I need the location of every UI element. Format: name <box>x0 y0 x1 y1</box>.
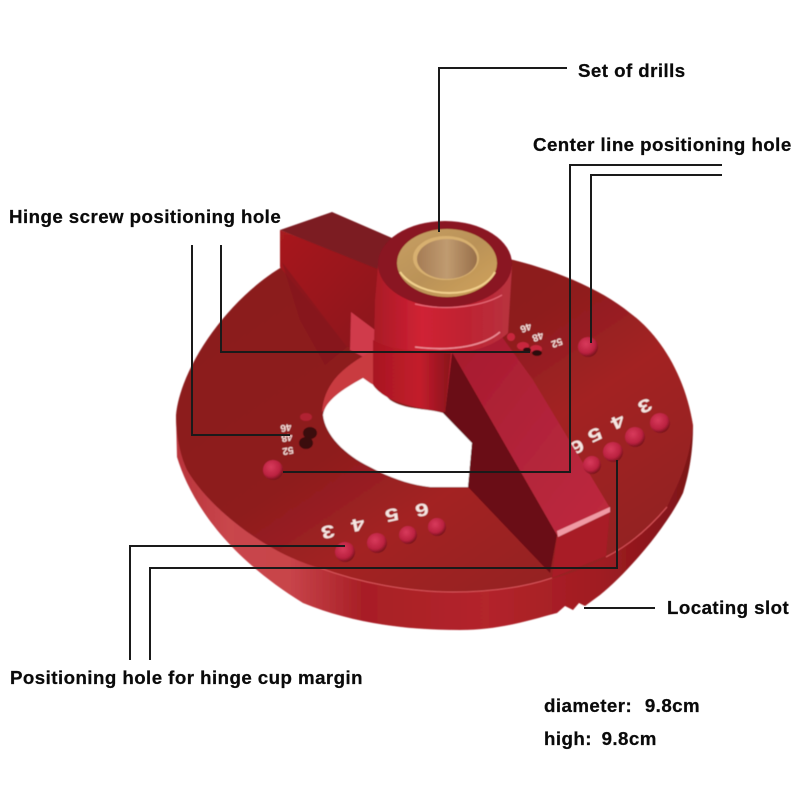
engraved numbers: 52 <box>281 444 294 456</box>
right rib <box>443 330 610 578</box>
leader: hinge screw right <box>221 245 530 352</box>
engraved numbers: 52 <box>549 335 564 349</box>
engraved numbers: 46 <box>518 320 533 334</box>
boss cylinder <box>373 266 512 412</box>
engraved numbers: 48 <box>280 431 293 443</box>
centre opening <box>323 378 472 487</box>
engraved numbers: 4 <box>607 410 628 433</box>
boss top <box>378 221 512 307</box>
leader: centre line positioning hole (left) <box>283 165 722 472</box>
engraved numbers: 5 <box>383 503 400 525</box>
engraved numbers: 6 <box>413 498 430 520</box>
label: locating slot: Locating slot <box>667 597 789 618</box>
engraved numbers: 3 <box>634 394 655 417</box>
engraved numbers: 46 <box>279 421 292 433</box>
centre opening rim <box>322 350 380 412</box>
leader: set of drills <box>439 68 567 232</box>
disc rim highlight <box>320 507 667 592</box>
engraved numbers: 48 <box>530 329 545 343</box>
label: center line positioning hole: Center line positioning hole <box>533 134 792 155</box>
product: drilling jig <box>176 212 693 630</box>
engraved numbers: 5 <box>584 423 605 446</box>
leader: locating slot <box>584 607 655 609</box>
engraved number 6, partly behind rib: 6 <box>566 435 587 458</box>
left rib <box>280 212 392 365</box>
disc side wall <box>176 415 693 630</box>
hinge screw holes <box>299 333 542 449</box>
label: diameter: diameter: 9.8cm <box>544 695 700 716</box>
engraved numbers: 4 <box>349 513 366 535</box>
disc top face <box>176 243 693 592</box>
engraved numbers <box>279 320 655 542</box>
label: set of drills: Set of drills <box>578 60 686 81</box>
label: hinge screw positioning hole: Hinge screw positioning hole <box>9 206 281 227</box>
brass bushing <box>397 229 497 297</box>
leader: hinge cup margin left <box>130 546 345 660</box>
leader: hinge screw left <box>192 245 290 435</box>
leader: hinge cup margin right <box>150 460 617 660</box>
label: positioning hole for hinge cup margin: Positioning hole for hinge cup margin <box>10 667 363 688</box>
leader: centre line positioning hole (right) <box>591 175 722 343</box>
label: high: high: 9.8cm <box>544 728 657 749</box>
engraved numbers: 3 <box>319 520 336 542</box>
positioning holes <box>263 337 670 562</box>
